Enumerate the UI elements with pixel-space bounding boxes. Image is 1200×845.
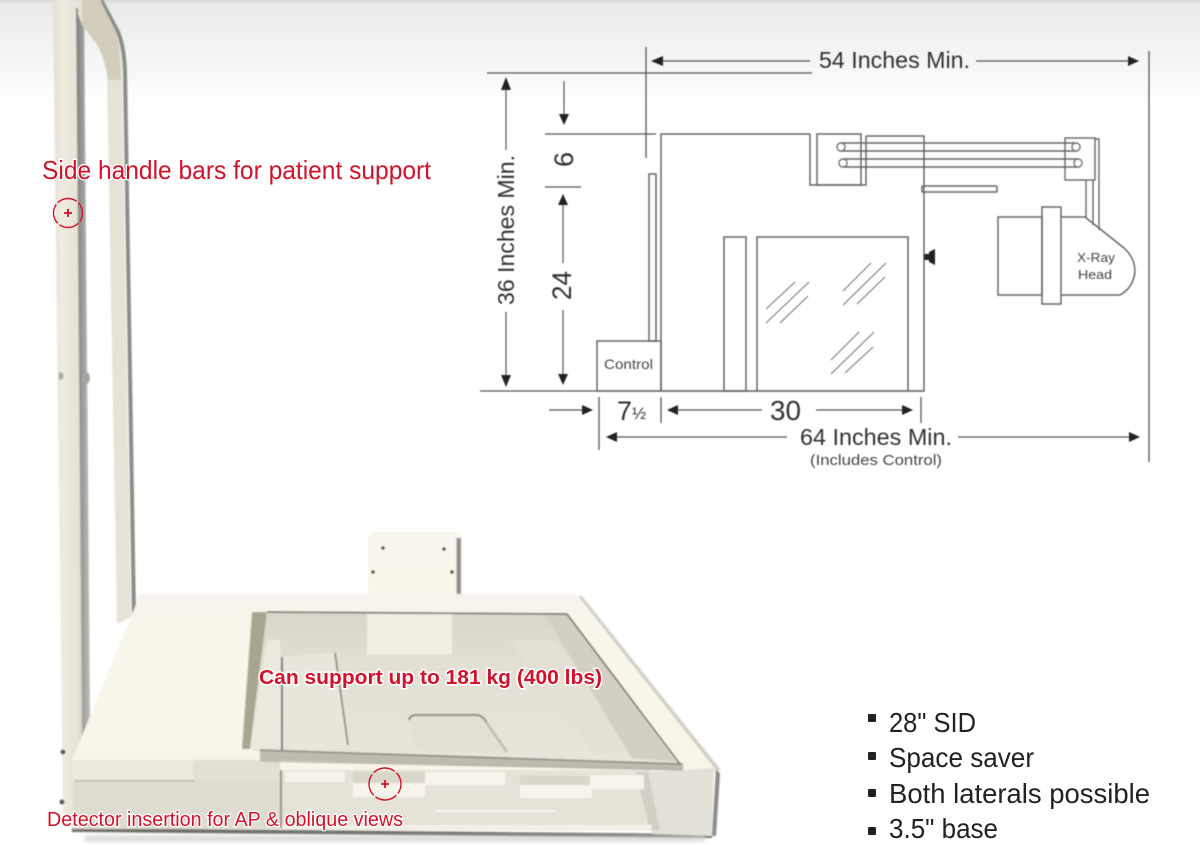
marker: detector insertion bbox=[369, 768, 401, 800]
bullet: base: 3.5" base bbox=[889, 813, 998, 844]
drawer handles bbox=[353, 772, 644, 798]
bullet: laterals: Both laterals possible bbox=[889, 778, 1150, 809]
dimension: 7 1/2: ½ bbox=[632, 404, 646, 423]
unit outline bbox=[597, 134, 997, 391]
glass hatch marks bbox=[766, 263, 886, 374]
marker: side handle bars bbox=[54, 198, 82, 228]
callout: detector insertion: Detector insertion for AP & oblique views bbox=[47, 808, 403, 831]
control label: Control bbox=[604, 356, 653, 372]
feature list bbox=[868, 707, 1150, 844]
dimension: 6: 6 bbox=[549, 152, 579, 167]
dimension: 36 inches: 36 Inches Min. bbox=[493, 155, 519, 305]
dimension: 7 1/2: 7 bbox=[617, 396, 632, 426]
support arm bbox=[837, 138, 1099, 230]
bullet: SID: 28" SID bbox=[889, 707, 976, 738]
dimension: 24: 24 bbox=[547, 271, 577, 300]
knob bbox=[924, 249, 935, 265]
x-ray head bbox=[998, 207, 1135, 304]
dimension diagram bbox=[480, 47, 1149, 469]
callout: load capacity: Can support up to 181 kg (400 lbs) bbox=[259, 667, 602, 689]
dimension: 30: 30 bbox=[770, 395, 801, 426]
dimension: 64 inches: 64 Inches Min. bbox=[800, 424, 952, 450]
dimension lines and ticks bbox=[480, 47, 1149, 462]
glass tray with cut-out bbox=[242, 612, 683, 770]
side handle bars bbox=[53, 0, 134, 825]
x-ray head label: X-Ray bbox=[1077, 250, 1116, 265]
x-ray head label bbox=[1077, 250, 1116, 282]
dimension arrows bbox=[501, 56, 1140, 442]
base body bbox=[72, 594, 721, 841]
bullet: space saver: Space saver bbox=[889, 742, 1034, 773]
dimension note: (Includes Control) bbox=[810, 452, 942, 469]
x-ray head label: Head bbox=[1078, 267, 1112, 282]
mounting plate with holes bbox=[368, 532, 462, 602]
callout: side handle bars: Side handle bars for patient support bbox=[42, 155, 432, 185]
photo: positioner base with side handle bars bbox=[53, 0, 721, 841]
dimension: 54 inches: 54 Inches Min. bbox=[819, 47, 970, 73]
